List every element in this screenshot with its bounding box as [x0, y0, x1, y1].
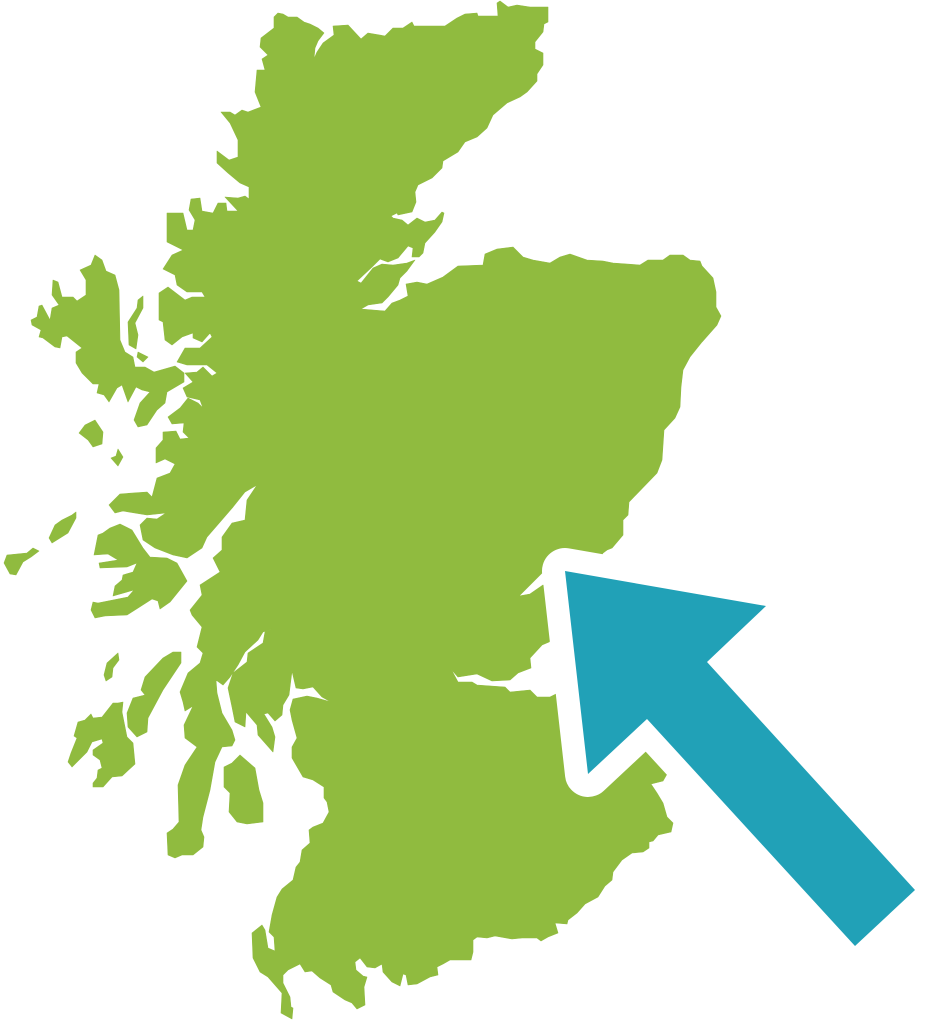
island: Colonsay — [104, 653, 119, 681]
arrow teal body — [565, 571, 915, 946]
island: Tiree — [4, 548, 39, 575]
island: Islay — [68, 702, 135, 787]
arrow white halo — [565, 571, 915, 946]
arrow pointing to location — [565, 571, 915, 946]
island: Raasay — [128, 296, 143, 349]
mainland — [109, 1, 721, 1019]
island: Mull — [91, 524, 187, 618]
island: Skye — [31, 255, 184, 427]
island: Arran — [224, 755, 263, 824]
island: Coll — [49, 512, 76, 543]
island: Eigg — [111, 449, 123, 466]
map of Scotland — [4, 1, 721, 1019]
island: Rum — [79, 420, 103, 447]
island: Jura — [127, 652, 181, 737]
island: Scalpay — [137, 352, 148, 362]
